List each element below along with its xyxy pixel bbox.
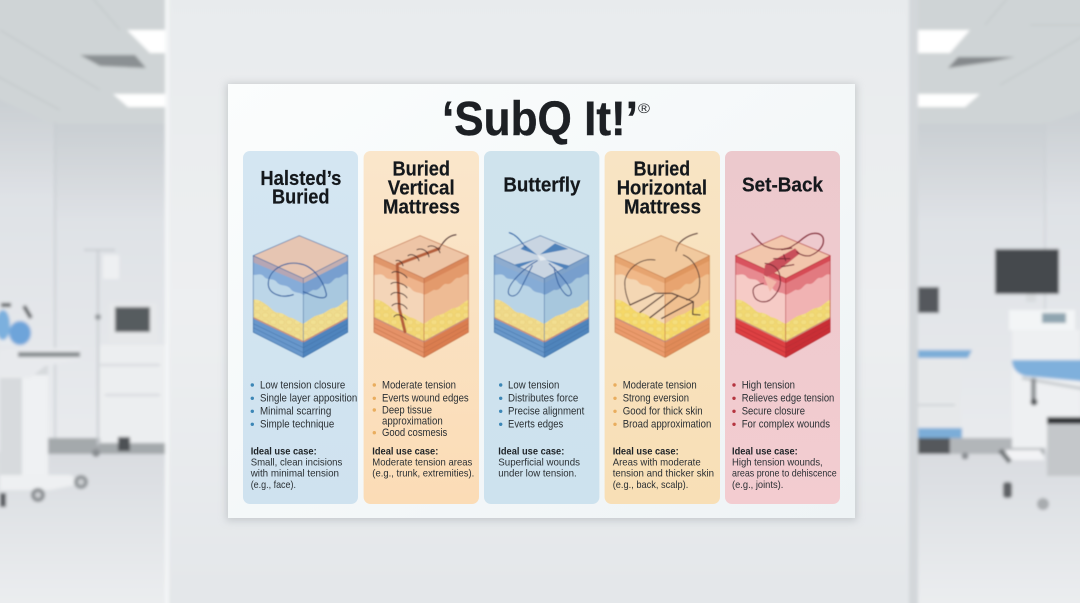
heading: Buried Horizontal Mattress: Buried [634, 159, 690, 181]
title: ® [638, 100, 651, 116]
heading: Butterfly: Butterfly [503, 175, 581, 197]
bullet list: Distributes force [508, 393, 578, 405]
ideal use case: Ideal use case: [732, 446, 798, 457]
bullet list: Broad approximation [623, 419, 711, 431]
heading: Buried Vertical Mattress: Vertical [388, 178, 455, 200]
bullet list [613, 379, 711, 431]
ideal use case: Ideal use case: [613, 446, 679, 457]
panel: Set-Back [725, 151, 840, 504]
bullet list: Low tension closure [260, 379, 345, 391]
icon: skin cube with vertical mattress suture [374, 235, 468, 357]
icon: skin cube with butterfly suture [494, 233, 589, 357]
heading: Buried Vertical Mattress [383, 159, 460, 218]
bullet list: High tension [742, 379, 795, 391]
title: ‘SubQ It!’ [442, 93, 638, 146]
ideal use case: under low tension. [498, 469, 577, 480]
panel: Buried Vertical Mattress [364, 151, 479, 504]
ideal use case [613, 446, 714, 491]
ideal use case: (e.g., back, scalp). [613, 480, 688, 491]
bullet list: Strong eversion [623, 393, 689, 405]
ideal use case [250, 446, 342, 491]
ideal use case: Ideal use case: [251, 446, 317, 457]
ideal use case [732, 446, 837, 491]
ideal use case [372, 446, 474, 480]
bullet list: Good for thick skin [623, 406, 703, 418]
ideal use case: Areas with moderate [613, 457, 701, 468]
bullet list: Moderate tension [623, 379, 697, 391]
bullet list: Secure closure [742, 406, 805, 418]
bullet list: approximation [382, 416, 443, 428]
ideal use case: Small, clean incisions [251, 457, 342, 468]
ideal use case: Ideal use case: [372, 446, 438, 457]
bullet list [732, 379, 834, 431]
centre wall [165, 0, 918, 603]
left room [0, 0, 175, 603]
heading: Buried Horizontal Mattress [617, 159, 707, 218]
heading: Halsted's Buried: Buried [272, 186, 330, 208]
panel: Butterfly [484, 151, 599, 504]
ideal use case: (e.g., trunk, extremities). [372, 469, 474, 480]
ideal use case [498, 446, 580, 480]
bullet list: Relieves edge tension [742, 393, 834, 405]
heading: Buried Vertical Mattress: Buried [392, 159, 450, 181]
ideal use case: High tension wounds, [732, 457, 823, 468]
bullet list: Everts edges [508, 419, 563, 431]
poster [226, 83, 857, 521]
heading: Buried Vertical Mattress: Mattress [383, 196, 460, 218]
heading: Buried Horizontal Mattress: Horizontal [617, 178, 707, 200]
bullet list: For complex wounds [742, 419, 830, 431]
ideal use case: (e.g., face). [251, 480, 296, 491]
bullet list: Good cosmesis [382, 427, 447, 439]
bullet list: Everts wound edges [382, 393, 469, 405]
bullet list [373, 379, 469, 439]
panel: Halsted's Buried [243, 151, 358, 504]
ideal use case: tension and thicker skin [613, 469, 714, 480]
bullet list: Low tension [508, 379, 559, 391]
icon: skin cube with horizontal mattress suture [615, 233, 709, 357]
heading: Buried Horizontal Mattress: Mattress [624, 196, 701, 218]
bullet list: Minimal scarring [260, 406, 331, 418]
ideal use case: Superficial wounds [498, 457, 580, 468]
bullet list: Moderate tension [382, 379, 456, 391]
heading: Halsted's Buried [260, 168, 341, 208]
bullet list: Precise alignment [508, 406, 584, 418]
ideal use case: areas prone to dehiscence [732, 469, 837, 480]
bullet list [499, 379, 584, 431]
bullet list [251, 379, 357, 431]
panel: Buried Horizontal Mattress [605, 151, 720, 504]
ideal use case: with minimal tension [250, 469, 339, 480]
heading: Halsted's Buried: Halsted’s [260, 168, 341, 190]
right room [910, 0, 1080, 603]
icon: skin cube with set-back suture [736, 233, 830, 357]
ideal use case: (e.g., joints). [732, 480, 783, 491]
ideal use case: Ideal use case: [498, 446, 564, 457]
bullet list: Deep tissue [382, 404, 432, 416]
bullet list: Single layer apposition [260, 393, 357, 405]
icon: skin cube with buried suture [253, 236, 348, 357]
heading: Set-Back: Set-Back [742, 175, 824, 197]
ideal use case: Moderate tension areas [372, 457, 472, 468]
bullet list: Simple technique [260, 419, 334, 431]
